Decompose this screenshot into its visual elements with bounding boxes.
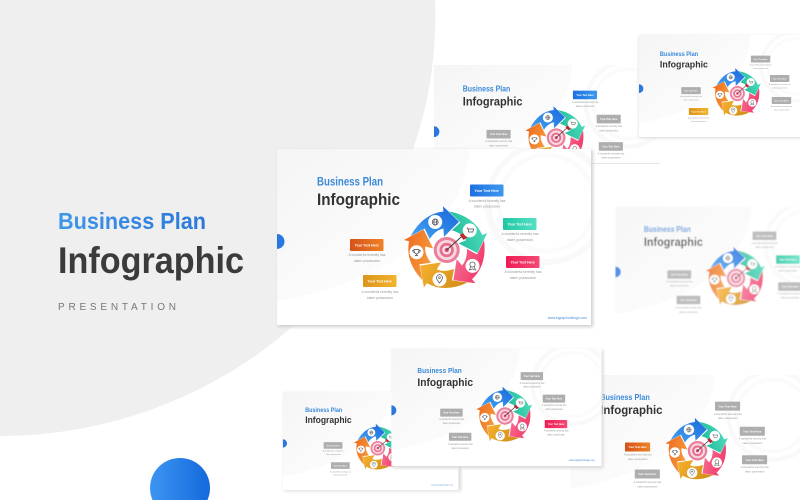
callout: grey 4: Your Text Here <box>638 472 657 476</box>
callout: yellow: A wonderful serenity has <box>362 290 399 294</box>
callout: teal: taken possession <box>779 270 798 273</box>
callout: grey 5: Your Text Here <box>443 412 460 415</box>
callout: teal <box>502 218 539 242</box>
callout: grey 4: taken possession <box>452 447 470 450</box>
callout: pink: A wonderful serenity has <box>544 429 569 432</box>
callout: grey 2: Your Text Here <box>773 77 788 80</box>
callout: grey 5: Your Text Here <box>326 444 341 447</box>
cycle wheel <box>518 103 596 178</box>
slide title: Business Plan <box>463 84 510 93</box>
slide title: Infographic <box>644 236 703 249</box>
slide title: Business Plan <box>600 392 650 402</box>
callout: grey 3 <box>741 455 769 474</box>
callout: grey 2: taken possession <box>545 408 564 411</box>
cycle wheel <box>658 415 739 493</box>
callout: orange <box>624 442 652 461</box>
callout: grey 5 <box>439 409 465 425</box>
slide title: Business Plan <box>417 366 462 375</box>
callout: grey 3: Your Text Here <box>774 99 789 102</box>
callout: grey 4: A wonderful serenity has <box>448 443 474 446</box>
callout: yellow <box>688 108 709 123</box>
slide title: Infographic <box>417 377 473 389</box>
callout: pink: Your Text Here <box>548 423 565 426</box>
callout: grey 3: taken possession <box>774 108 789 111</box>
callout: blue: Your Text Here <box>576 94 594 97</box>
callout: yellow: taken possession <box>691 120 706 123</box>
callout: grey 3 <box>771 97 792 111</box>
callout: grey 3: taken possession <box>781 297 800 300</box>
callout: blue: A wonderful serenity has <box>469 199 506 203</box>
callout: yellow: taken possession <box>367 296 393 300</box>
callout: grey 1: taken possession <box>753 67 768 70</box>
callout: blue: A wonderful serenity has <box>572 101 599 104</box>
callout: grey 1: Your Text Here <box>524 375 541 378</box>
callout: grey 5: Your Text Here <box>671 274 688 277</box>
callout: pink: Your Text Here <box>511 260 535 264</box>
callout: blue: Your Text Here <box>475 189 499 193</box>
heading: Business Plan: Business Plan <box>58 208 206 234</box>
slide title <box>305 407 352 425</box>
callout: pink: taken possession <box>510 276 536 280</box>
callout: pink: taken possession <box>547 433 566 436</box>
callout: blue: taken possession <box>576 105 595 108</box>
callout: grey 2: Your Text Here <box>743 429 762 433</box>
callout: grey 2 <box>596 115 623 132</box>
callout: grey 1 <box>520 372 545 389</box>
callout: orange <box>349 239 386 263</box>
slide title: Infographic <box>660 59 709 70</box>
slide title: Infographic <box>600 403 663 417</box>
slide title: Business Plan <box>317 176 383 188</box>
slide: bottom centre <box>391 348 602 466</box>
callout: grey 3: A wonderful serenity has <box>771 105 792 108</box>
callout: grey 1: Your Text Here <box>756 235 774 238</box>
slide title <box>644 225 703 249</box>
callout: grey 2: A wonderful serenity has <box>596 125 623 128</box>
callout: grey 1 <box>750 56 771 70</box>
website footer: www.ingraphicdesign.com <box>431 484 453 487</box>
callout: grey 2: A wonderful serenity has <box>739 436 767 441</box>
callout: grey 4: A wonderful serenity has <box>330 470 351 473</box>
callout: blue <box>469 184 506 208</box>
callout: grey 4 <box>330 462 351 477</box>
callout: grey 2: taken possession <box>599 129 619 132</box>
slide title: Business Plan <box>305 407 342 414</box>
callout: orange: taken possession <box>354 259 380 263</box>
callout: grey 2 <box>739 427 767 445</box>
callout: grey 4: Your Text Here <box>334 464 348 467</box>
slide: main <box>277 149 591 325</box>
grey curved background shape <box>0 0 435 436</box>
callout: blue <box>572 91 599 108</box>
callout: grey 3 <box>777 282 800 300</box>
slide title: Business Plan <box>644 225 691 234</box>
callout: grey 1: taken possession <box>755 246 775 249</box>
callout: grey 3: taken possession <box>745 470 765 474</box>
slide title: Business Plan <box>660 51 698 58</box>
slide title <box>417 366 473 389</box>
callout: grey 3: Your Text Here <box>781 286 799 289</box>
subheading: Presentation: PRESENTATION <box>58 302 176 313</box>
slide: top right <box>639 35 800 137</box>
callout: grey 4 <box>448 433 474 450</box>
callout: grey 2: A wonderful serenity has <box>769 83 791 86</box>
callout: grey 4: taken possession <box>638 484 658 489</box>
callout: grey 3: Your Text Here <box>745 458 764 462</box>
callout: grey 4: taken possession <box>679 311 699 314</box>
callout: grey 4: A wonderful serenity has <box>634 480 662 484</box>
callout: teal: A wonderful serenity has <box>502 232 539 236</box>
callout: grey 1 <box>752 232 779 249</box>
callout: yellow <box>362 275 399 300</box>
callout: grey 1 <box>714 402 742 420</box>
callout: grey 5: taken possession <box>326 453 341 456</box>
callout: orange: Your Text Here <box>355 244 379 248</box>
callout: grey 2: Your Text Here <box>546 398 563 401</box>
callout: grey 5 <box>323 442 344 456</box>
slide title: Infographic <box>317 191 400 209</box>
cycle wheel <box>707 66 769 126</box>
callout: grey 4 <box>634 470 662 488</box>
callout: grey 5 <box>666 270 693 288</box>
callout: teal: Your Text Here <box>779 259 797 262</box>
slide shadow: main <box>278 150 593 327</box>
callout: pink: A wonderful serenity has <box>505 270 542 274</box>
callout: grey 2 <box>542 395 567 411</box>
callout: grey 2: taken possession <box>772 86 787 89</box>
callout: pink <box>505 256 542 280</box>
callout: orange: A wonderful serenity has <box>624 452 652 456</box>
callout: grey 3: taken possession <box>602 157 621 160</box>
slide title <box>317 176 400 209</box>
callout: grey 1: Your Text Here <box>754 58 768 61</box>
callout: grey 5: A wonderful serenity has <box>485 140 513 143</box>
callout: grey 4 <box>676 296 703 314</box>
callout: grey 1: taken possession <box>718 416 738 420</box>
blue circle decoration <box>150 458 210 500</box>
slide shadow: bottom centre <box>393 350 603 468</box>
slide title: Infographic <box>463 94 523 108</box>
cycle wheel <box>394 202 502 307</box>
cycle wheel <box>699 244 775 318</box>
callout: teal <box>775 255 800 273</box>
callout: grey 5: A wonderful serenity has <box>666 280 693 283</box>
slide: top centre <box>434 65 625 160</box>
callout: grey 5 <box>680 87 702 101</box>
slide title <box>600 392 663 417</box>
heading: Infographic: Infographic <box>58 240 244 281</box>
callout: teal: Your Text Here <box>508 222 532 226</box>
callout: yellow: Your Text Here <box>368 280 392 284</box>
callout: grey 5: A wonderful serenity has <box>680 95 702 98</box>
slide shadow: bottom left <box>284 393 461 491</box>
callout: grey 4: taken possession <box>333 474 348 477</box>
callout: grey 3: Your Text Here <box>602 145 620 148</box>
callout: orange: A wonderful serenity has <box>349 253 386 257</box>
cycle wheel <box>348 421 409 480</box>
callout: orange: Your Text Here <box>628 445 647 449</box>
callout: blue: taken possession <box>474 204 500 208</box>
callout: grey 5: taken possession <box>684 98 699 101</box>
callout: grey 5: Your Text Here <box>490 133 508 136</box>
callout: grey 2 <box>769 75 791 89</box>
callout: pink <box>544 420 569 436</box>
slide title <box>463 84 523 108</box>
slide title <box>660 51 709 70</box>
slide title: Infographic <box>305 415 352 425</box>
slide: bottom right <box>600 375 769 489</box>
slide shadow: top right <box>639 36 800 138</box>
callout: grey 5: taken possession <box>443 422 461 425</box>
callout: grey 2: Your Text Here <box>600 118 618 121</box>
callout: grey 5: taken possession <box>489 144 509 147</box>
callout: grey 3: A wonderful serenity has <box>598 152 625 155</box>
callout: yellow: Your Text Here <box>692 110 706 113</box>
callout: teal: taken possession <box>507 238 533 242</box>
callout: grey 3: A wonderful serenity has <box>741 465 769 469</box>
callout: grey 1: A wonderful serenity has <box>750 64 771 67</box>
website footer: www.ingraphicdesign.com <box>569 460 595 462</box>
callout: grey 4: Your Text Here <box>452 436 469 439</box>
slide: right middle (faded) <box>616 203 800 331</box>
callout: grey 5: taken possession <box>670 285 689 288</box>
callout: orange: taken possession <box>628 457 648 461</box>
callout: grey 1: Your Text Here <box>718 404 737 408</box>
slide edge line <box>591 163 660 164</box>
slide: bottom left <box>282 392 458 490</box>
callout: grey 5 <box>485 130 513 147</box>
callout: grey 1: A wonderful serenity has <box>520 382 545 385</box>
callout: grey 4: A wonderful serenity has <box>676 307 703 310</box>
callout: grey 2: A wonderful serenity has <box>542 404 567 407</box>
callout: grey 1: taken possession <box>523 386 542 389</box>
callout: yellow: A wonderful serenity has <box>688 116 709 119</box>
callout: grey 5: A wonderful serenity has <box>439 418 465 421</box>
callout: grey 4: Your Text Here <box>680 299 698 302</box>
callout: grey 3 <box>598 142 625 160</box>
callout: grey 2: taken possession <box>743 441 763 445</box>
callout: grey 1: A wonderful serenity has <box>752 242 779 245</box>
callout: grey 1: A wonderful serenity has <box>714 412 742 416</box>
cycle wheel <box>470 384 542 454</box>
website footer: www.ingraphicdesign.com <box>548 316 587 320</box>
callout: grey 5: Your Text Here <box>684 90 699 93</box>
callout: grey 5: A wonderful serenity has <box>323 450 344 453</box>
